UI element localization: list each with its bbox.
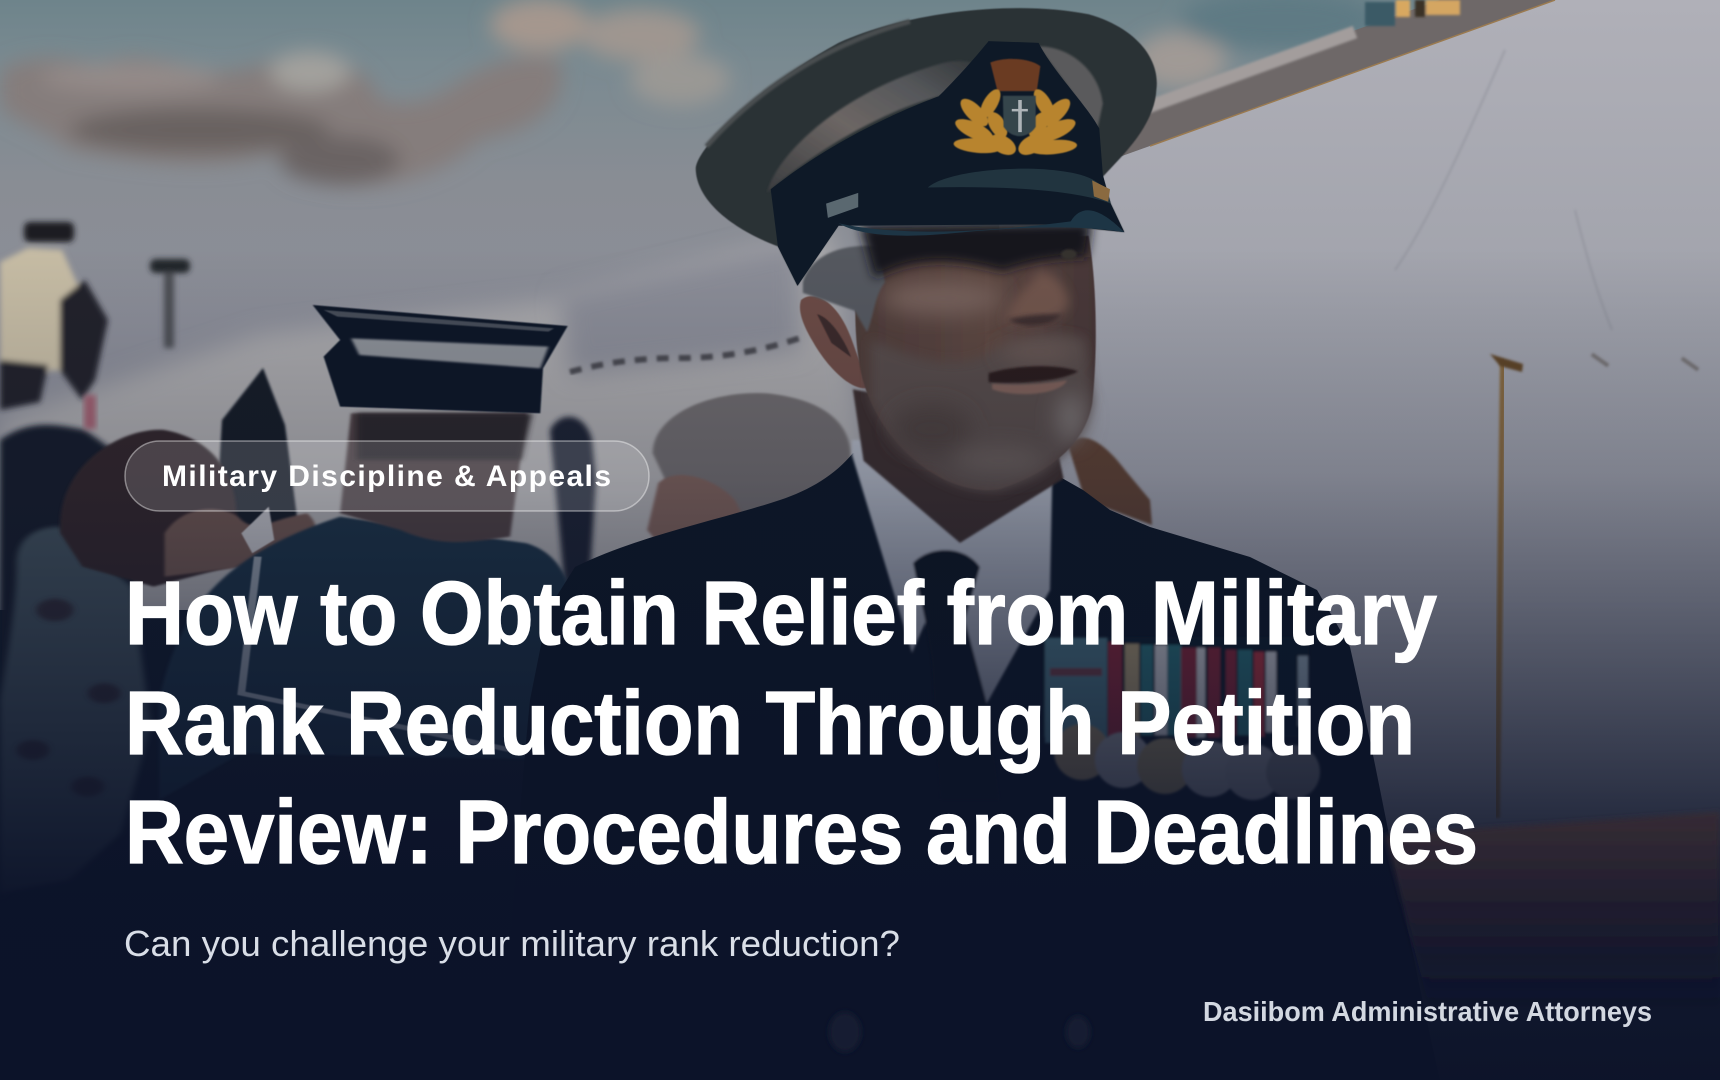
sailor neck (340, 413, 527, 542)
dark crowd at left (0, 425, 140, 900)
officer medals (1054, 724, 1320, 800)
cap peak (839, 210, 1124, 236)
background canopy and crowd (0, 222, 870, 1080)
sailor collar trim (241, 557, 527, 753)
attribution: Dasiibom Administrative Attorneys (1203, 996, 1652, 1027)
sailor cap (313, 305, 568, 413)
officer jacket (500, 453, 1440, 1080)
brown ground band at the right (1385, 812, 1720, 1010)
cap crown (696, 8, 1157, 286)
anchor (1003, 96, 1036, 136)
chin strap (826, 193, 858, 218)
title: How to Obtain Relief from Military (125, 564, 1437, 664)
cap piping (706, 21, 910, 146)
child with hood at left (0, 430, 316, 893)
tent fringe (570, 338, 800, 372)
woman with grey hair (647, 393, 851, 557)
tent wall on the right with roof strip (980, 0, 1720, 840)
face (855, 236, 1096, 490)
cap front (771, 41, 1124, 286)
cap badge (952, 59, 1079, 159)
crown (990, 59, 1040, 91)
title: Rank Reduction Through Petition (125, 674, 1415, 774)
cap band (928, 169, 1111, 204)
tent seams (1395, 50, 1612, 330)
category pill: Military Discipline & Appeals (162, 460, 611, 493)
officer head and cap (696, 8, 1157, 543)
officer shirt collar and tie (852, 440, 1053, 800)
left machine and lamp (0, 222, 190, 410)
dark fill behind lower crowd (0, 610, 560, 1080)
mouth (989, 366, 1078, 383)
neighbouring head behind officer (1068, 438, 1152, 525)
ear (800, 296, 869, 388)
title: Review: Procedures and Deadlines (125, 783, 1478, 883)
beard (871, 335, 1093, 491)
neck (853, 389, 1064, 543)
category pill (125, 441, 649, 511)
title (125, 564, 1478, 883)
forehead light (881, 280, 1003, 316)
shadow under cap peak (860, 221, 1092, 279)
hood (0, 527, 151, 893)
subtitle: Can you challenge your military rank reduction? (124, 923, 900, 964)
hair (803, 246, 885, 332)
sailor uniform (159, 517, 576, 800)
pole (1497, 360, 1503, 818)
nose (1005, 271, 1069, 324)
leaves (952, 86, 1079, 159)
cap top highlight (767, 61, 974, 193)
sailor seen from behind (159, 305, 576, 800)
faint insignia near the bottom (829, 1012, 1090, 1052)
officer medal ribbons (1043, 637, 1309, 743)
